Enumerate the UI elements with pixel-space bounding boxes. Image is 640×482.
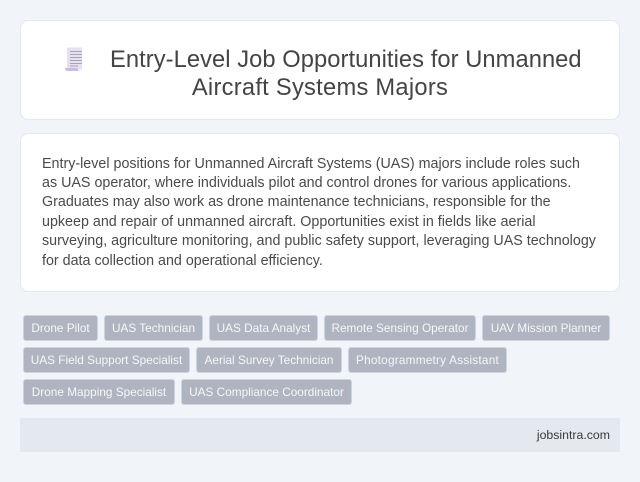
- icon: document scroll: [65, 47, 83, 71]
- tag: UAS Field Support Specialist: UAS Field Support Specialist: [31, 353, 182, 367]
- tag: Aerial Survey Technician: [196, 347, 342, 373]
- panel: title card: [20, 20, 620, 120]
- tag: Photogrammetry Assistant: [348, 347, 507, 373]
- text block: description: as UAS operator, where individuals pilot and control drones for various applications.: [42, 175, 571, 191]
- title: Entry-Level Job Opportunities for Unmanned: [110, 47, 582, 73]
- tag: Aerial Survey Technician: Aerial Survey Technician: [205, 353, 333, 367]
- tag: UAS Compliance Coordinator: UAS Compliance Coordinator: [189, 385, 344, 399]
- text block: description: surveying, agriculture monitoring, and public safety support, leveraging UAS technology: [42, 233, 596, 249]
- tag: Drone Mapping Specialist: Drone Mapping Specialist: [32, 385, 166, 399]
- title: [110, 47, 582, 101]
- tag: UAS Technician: UAS Technician: [112, 321, 195, 335]
- text block: description: Entry-level positions for Unmanned Aircraft Systems (UAS) majors include roles such: [42, 156, 580, 172]
- tag: UAV Mission Planner: UAV Mission Planner: [491, 321, 601, 335]
- tag: Photogrammetry Assistant: Photogrammetry Assistant: [356, 353, 499, 367]
- title: Aircraft Systems Majors: [192, 75, 448, 101]
- tag: Remote Sensing Operator: Remote Sensing Operator: [331, 321, 469, 335]
- tag: UAS Field Support Specialist: [23, 347, 190, 373]
- tag: UAV Mission Planner: [482, 315, 610, 341]
- tag: Drone Pilot: Drone Pilot: [31, 321, 90, 335]
- text block: description: Graduates may also work as drone maintenance technicians, responsible for the: [42, 194, 551, 210]
- text block: description: [42, 156, 596, 269]
- panel: description card: [20, 133, 620, 292]
- panel: job tags: [23, 315, 610, 405]
- tag: UAS Data Analyst: UAS Data Analyst: [217, 321, 310, 335]
- tag: Drone Mapping Specialist: [23, 379, 175, 405]
- tag: UAS Compliance Coordinator: [181, 379, 352, 405]
- text block: description: for data collection and operational efficiency.: [42, 253, 323, 269]
- text block: description: upkeep and repair of unmanned aircraft. Opportunities exist in fields like aerial: [42, 214, 536, 230]
- footer text: site name: jobsintra.com: [537, 428, 610, 442]
- tag: UAS Data Analyst: [209, 315, 318, 341]
- tag: Drone Pilot: [23, 315, 98, 341]
- tag: Remote Sensing Operator: [324, 315, 476, 341]
- footer bar: [20, 418, 620, 452]
- tag: UAS Technician: [104, 315, 203, 341]
